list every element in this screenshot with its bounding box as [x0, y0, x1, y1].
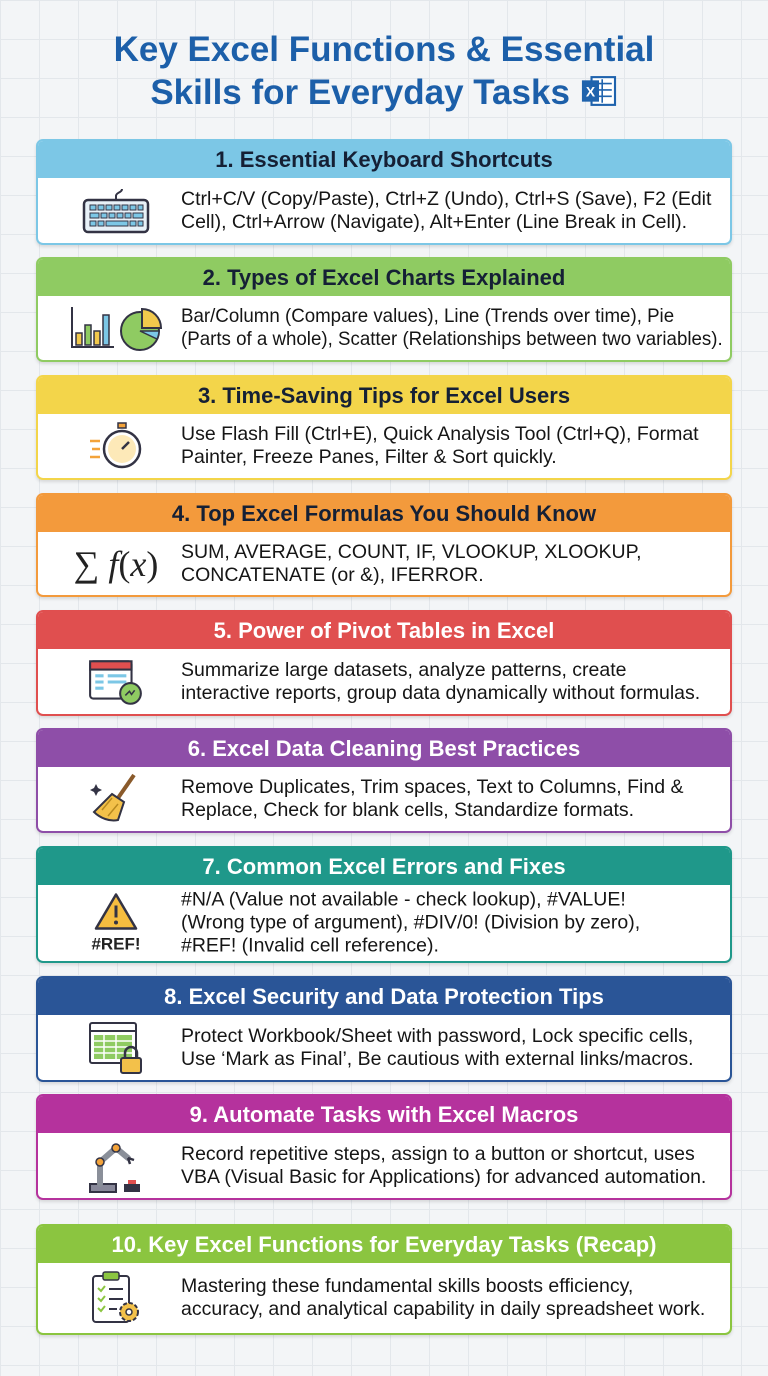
heading 3: 3. Time-Saving Tips for Excel Users: [198, 383, 570, 408]
text 10: Mastering these fundamental skills boosts efficiency,: [181, 1275, 633, 1297]
text 2: Bar/Column (Compare values), Line (Trends over time), Pie: [181, 305, 674, 327]
heading 3: [38, 377, 730, 414]
icon: charts: [71, 307, 162, 351]
text 7: #N/A (Value not available - check lookup), #VALUE!: [181, 888, 626, 910]
panel 5: pivot: [36, 610, 732, 716]
text 9: VBA (Visual Basic for Applications) for advanced automation.: [181, 1166, 706, 1188]
icon: pivot table: [89, 660, 142, 705]
heading 8: 8. Excel Security and Data Protection Tips: [164, 984, 604, 1009]
heading 6: 6. Excel Data Cleaning Best Practices: [188, 736, 580, 761]
heading 4: 4. Top Excel Formulas You Should Know: [172, 501, 596, 526]
panel 6: data cleaning: [36, 728, 732, 833]
text 1: Ctrl+C/V (Copy/Paste), Ctrl+Z (Undo), Ctrl+S (Save), F2 (Edit: [181, 188, 711, 210]
icon: clipboard gear: [92, 1271, 139, 1323]
panel 1: keyboard shortcuts: [36, 139, 732, 245]
panel 3: time saving: [36, 375, 732, 480]
text 8: [181, 1024, 694, 1070]
text 3: Painter, Freeze Panes, Filter & Sort quickly.: [181, 446, 557, 468]
text 7: #REF! (Invalid cell reference).: [181, 934, 439, 956]
icon: warning #REF!: #REF!: [91, 934, 141, 954]
title: Key Excel Functions & Essential: [114, 30, 654, 69]
title: [114, 30, 654, 112]
heading 6: [38, 730, 730, 767]
text 3: Use Flash Fill (Ctrl+E), Quick Analysis Tool (Ctrl+Q), Format: [181, 423, 699, 445]
heading 5: [38, 612, 730, 649]
text 2: [181, 305, 723, 350]
panel 9: macros: [36, 1094, 732, 1200]
text 5: [181, 658, 700, 704]
icon: stopwatch: [90, 422, 142, 468]
heading 4: [38, 495, 730, 532]
heading 2: 2. Types of Excel Charts Explained: [203, 265, 565, 290]
heading 7: 7. Common Excel Errors and Fixes: [202, 854, 566, 879]
panel 2: charts: [36, 257, 732, 362]
heading 10: [38, 1226, 730, 1263]
icon: warning #REF!: [91, 893, 141, 954]
text 10: [181, 1275, 705, 1320]
icon: robot arm: [89, 1143, 140, 1193]
text 6: Remove Duplicates, Trim spaces, Text to Columns, Find &: [181, 776, 684, 798]
text 6: Replace, Check for blank cells, Standardize formats.: [181, 799, 634, 821]
text 7: (Wrong type of argument), #DIV/0! (Division by zero),: [181, 912, 640, 934]
panel 10: recap: [36, 1224, 732, 1335]
text 6: [181, 776, 684, 821]
text 5: interactive reports, group data dynamically without formulas.: [181, 682, 700, 704]
title: Skills for Everyday Tasks: [150, 73, 570, 112]
text 3: [181, 423, 699, 468]
text 4: CONCATENATE (or &), IFERROR.: [181, 564, 484, 586]
heading 8: [38, 978, 730, 1015]
text 10: accuracy, and analytical capability in daily spreadsheet work.: [181, 1298, 705, 1320]
heading 5: 5. Power of Pivot Tables in Excel: [214, 618, 554, 643]
panel 7: errors: [36, 846, 732, 963]
heading 1: [38, 141, 730, 178]
text 9: Record repetitive steps, assign to a button or shortcut, uses: [181, 1142, 695, 1164]
icon: keyboard: [82, 189, 150, 234]
heading 10: 10. Key Excel Functions for Everyday Tasks (Recap): [112, 1232, 656, 1257]
heading 9: 9. Automate Tasks with Excel Macros: [190, 1102, 578, 1127]
text 1: Cell), Ctrl+Arrow (Navigate), Alt+Enter (Line Break in Cell).: [181, 210, 687, 232]
text 8: Use ‘Mark as Final’, Be cautious with external links/macros.: [181, 1048, 694, 1070]
text 2: (Parts of a whole), Scatter (Relationships between two variables).: [181, 328, 723, 350]
text 8: Protect Workbook/Sheet with password, Lock specific cells,: [181, 1024, 693, 1046]
text 7: [181, 888, 640, 956]
heading 7: [38, 848, 730, 885]
heading 1: 1. Essential Keyboard Shortcuts: [215, 147, 553, 172]
panel 8: security: [36, 976, 732, 1082]
heading 9: [38, 1096, 730, 1133]
icon: broom: [90, 774, 136, 822]
text 9: [181, 1142, 706, 1188]
heading 2: [38, 259, 730, 296]
icon: sigma f(x): ∑ f(x): [74, 544, 158, 584]
title: X: [585, 83, 595, 99]
text 4: [181, 540, 642, 586]
text 1: [181, 188, 712, 232]
text 4: SUM, AVERAGE, COUNT, IF, VLOOKUP, XLOOKUP,: [181, 540, 642, 562]
panel 4: formulas: [36, 493, 732, 597]
text 5: Summarize large datasets, analyze patterns, create: [181, 658, 626, 680]
icon: sheet with lock: [89, 1022, 142, 1074]
